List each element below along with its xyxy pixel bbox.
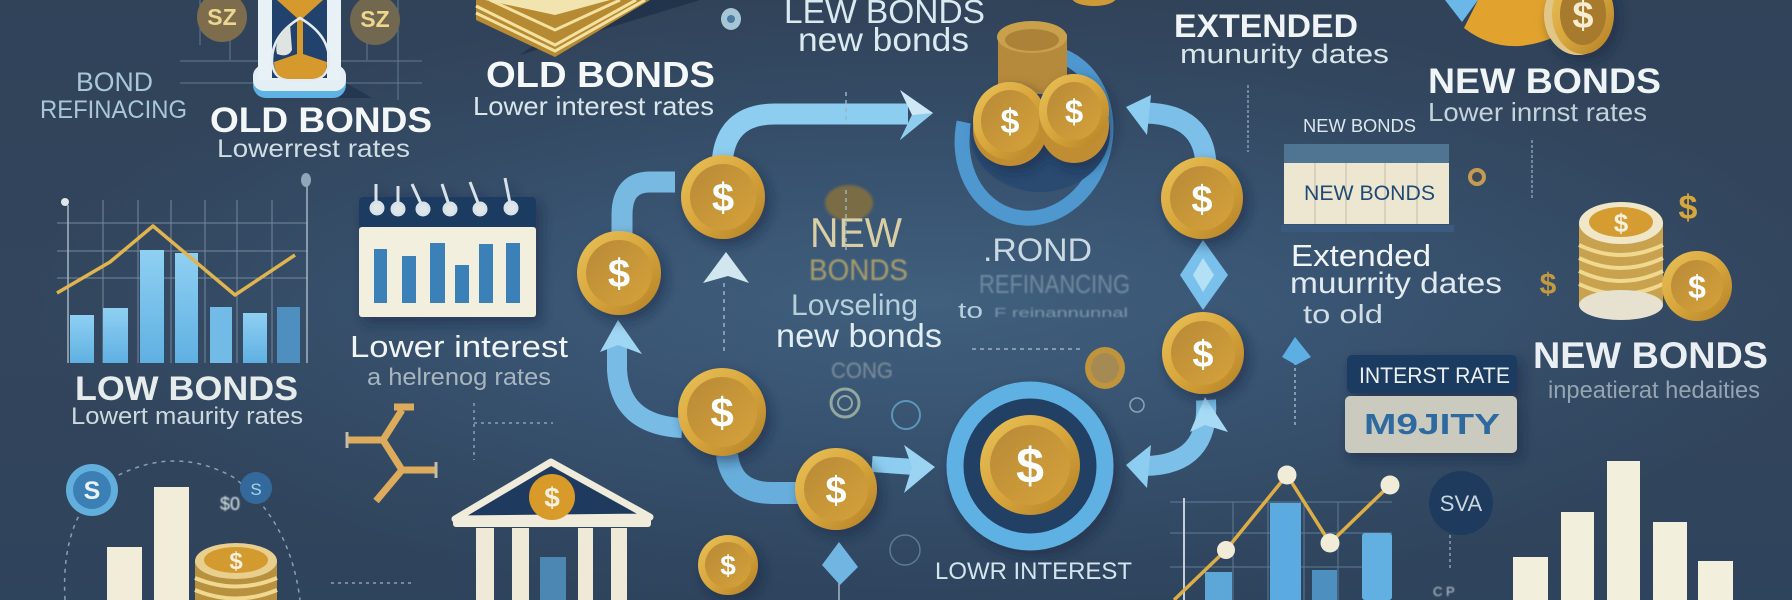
icon: hourglass with coins: SZ [360, 6, 390, 32]
arrow: lower coin up to left coin [600, 320, 682, 428]
arrow: coin to top stack [722, 90, 933, 165]
arrow: small up arrow left centre [703, 252, 749, 283]
heading: low bonds: Lowert maurity rates [71, 403, 303, 430]
chart: coin stack with cream bars: S [250, 480, 262, 499]
heading: old bonds centre: Lower interest rates [473, 91, 714, 121]
heading: low bonds: LOW BONDS [75, 370, 298, 408]
icon: coin lower centre: $ [825, 470, 847, 512]
icon: hourglass with coins [180, 0, 422, 100]
icon: top coin stack with ring: $ [1065, 93, 1083, 130]
heading: lew bonds: new bonds [798, 21, 969, 58]
icon: coin right upper [1161, 157, 1243, 239]
icon: coin stack right: $ [1688, 269, 1706, 305]
icon: calendar with bars [359, 178, 536, 317]
heading: old bonds left: Lowerrest rates [217, 135, 410, 163]
icon: gold dollar signs [1540, 189, 1698, 301]
icon: small pin [721, 8, 741, 30]
icon: gold bond stack [476, 0, 700, 57]
icon: coin lower left: $ [710, 389, 734, 436]
icon: small gold ring [1470, 170, 1484, 184]
card: interest rate maturity [1345, 355, 1517, 453]
heading: new bonds bottom right: NEW BONDS [1533, 335, 1768, 376]
text: lower interest: a helrenog rates [367, 364, 551, 391]
label: lowr interest: LOWR INTEREST [935, 558, 1132, 585]
icon: coin stack right [1579, 202, 1732, 321]
arrow: small coin to ring [872, 445, 935, 493]
heading: new bonds bottom right: inpeatierat hedaities [1548, 377, 1760, 404]
centre text: bond refinancing: .ROND [983, 232, 1092, 268]
icon: small coin bottom [698, 535, 758, 595]
centre text: new bonds: CONG [831, 358, 893, 383]
small labels under badge [1433, 535, 1455, 599]
heading: new bonds top right: Lower inrnst rates [1428, 97, 1647, 127]
arrow: small up arrow bottom [822, 542, 858, 600]
heading: new bonds bottom right [1533, 335, 1768, 404]
icon: gold dollar signs: $ [1540, 268, 1557, 301]
card: new bonds calendar: NEW BONDS [1304, 182, 1435, 205]
centre text: new bonds [776, 185, 942, 383]
heading: new bonds top right: NEW BONDS [1428, 62, 1661, 101]
icon: coin upper left: $ [712, 176, 734, 220]
text: extended maturity dates to old: Extended [1291, 238, 1431, 273]
centre text: new bonds: NEW [810, 209, 902, 256]
card: interest rate maturity: INTERST RATE [1359, 363, 1510, 388]
heading: old bonds centre [473, 54, 715, 121]
icon: top coin stack with ring [944, 21, 1124, 235]
arrow: coin to left coin [622, 182, 675, 245]
chart: coin stack with cream bars: $ [229, 548, 243, 575]
badge: sva: SVA [1440, 491, 1483, 516]
decorative dashed guides right [1248, 85, 1532, 200]
card: interest rate maturity: M9JITY [1364, 409, 1500, 441]
centre text: bond refinancing: to [958, 298, 983, 323]
icon: coin far left: $ [608, 252, 630, 296]
text: extended maturity dates to old [1290, 238, 1502, 329]
icon: coin lower centre [795, 448, 877, 530]
arrow: lower coin to small coin [727, 455, 810, 493]
heading: bond refinancing [40, 67, 187, 124]
icon: coin upper left [681, 155, 765, 239]
icon: coin stack right: $ [1614, 208, 1629, 238]
icon: bank building [453, 462, 651, 600]
arrow: small blue up arrow right [1282, 337, 1311, 425]
icon: coin lower left [678, 368, 766, 456]
icon: coin far left [577, 231, 661, 315]
badge: sva [1429, 471, 1493, 535]
chart: coin stack with cream bars [65, 461, 300, 600]
icon: small coin bottom: $ [720, 550, 736, 581]
text: extended maturity dates to old: muurrity dates [1290, 267, 1502, 300]
centre text: bond refinancing [958, 232, 1130, 323]
arrow: right coin to bottom ring [1126, 397, 1228, 488]
icon: bank building: $ [544, 482, 560, 513]
icon: top gold fragment [1072, 0, 1116, 6]
icon: gold dollar signs: $ [1679, 189, 1698, 227]
chart: bars with line, low bonds [57, 173, 311, 363]
centre text: new bonds: new bonds [776, 317, 942, 354]
small decorative marks centre [724, 90, 1144, 565]
icon: pie chart with coin [1445, 0, 1614, 55]
centre text: new bonds: Lovseling [791, 289, 918, 322]
centre text: bond refinancing: F reinannunnal [994, 305, 1128, 320]
heading: bond refinancing: REFINACING [40, 96, 187, 124]
heading: lew bonds [784, 0, 985, 58]
text: lower interest: Lower interest [350, 329, 568, 364]
chart: line and bars bottom right [1170, 466, 1400, 600]
chart: coin stack with cream bars: S [84, 477, 100, 505]
icon: coin right upper: $ [1191, 179, 1213, 221]
arrow: double arrow between right coins [1180, 240, 1228, 310]
chart: cream bars bottom right [1513, 461, 1733, 600]
decorative dotted guides [331, 403, 553, 583]
heading: extended maturity dates: munurity dates [1180, 39, 1389, 69]
icon: small dim coin [1085, 347, 1125, 389]
arrow: right coin to top stack [1126, 95, 1206, 165]
card: new bonds calendar [1281, 116, 1454, 232]
icon: coin right lower [1162, 312, 1244, 394]
text: extended maturity dates to old: to old [1303, 299, 1383, 329]
heading: extended maturity dates [1174, 8, 1389, 69]
text: lower interest [350, 329, 568, 391]
icon: hourglass with coins: SZ [207, 4, 237, 30]
icon: top coin stack with ring: $ [1001, 103, 1020, 141]
icon: central coin in blue ring: $ [1016, 438, 1044, 494]
heading: old bonds centre: OLD BONDS [486, 54, 715, 95]
small labels under badge: C P [1433, 584, 1455, 599]
heading: old bonds left: OLD BONDS [210, 101, 432, 140]
chart: coin stack with cream bars: $0 [220, 494, 240, 514]
heading: low bonds [71, 370, 303, 430]
heading: bond refinancing: BOND [76, 67, 153, 97]
icon: central coin in blue ring [955, 390, 1105, 542]
icon: coin right lower: $ [1192, 334, 1214, 376]
heading: old bonds left [210, 101, 432, 163]
heading: new bonds top right [1428, 62, 1661, 127]
centre text: new bonds: BONDS [809, 254, 908, 287]
icon: branching tan connector [346, 407, 436, 501]
heading: extended maturity dates: EXTENDED [1174, 8, 1358, 44]
centre text: bond refinancing: REFINANCING [979, 269, 1130, 299]
card: new bonds calendar: NEW BONDS [1303, 116, 1416, 136]
